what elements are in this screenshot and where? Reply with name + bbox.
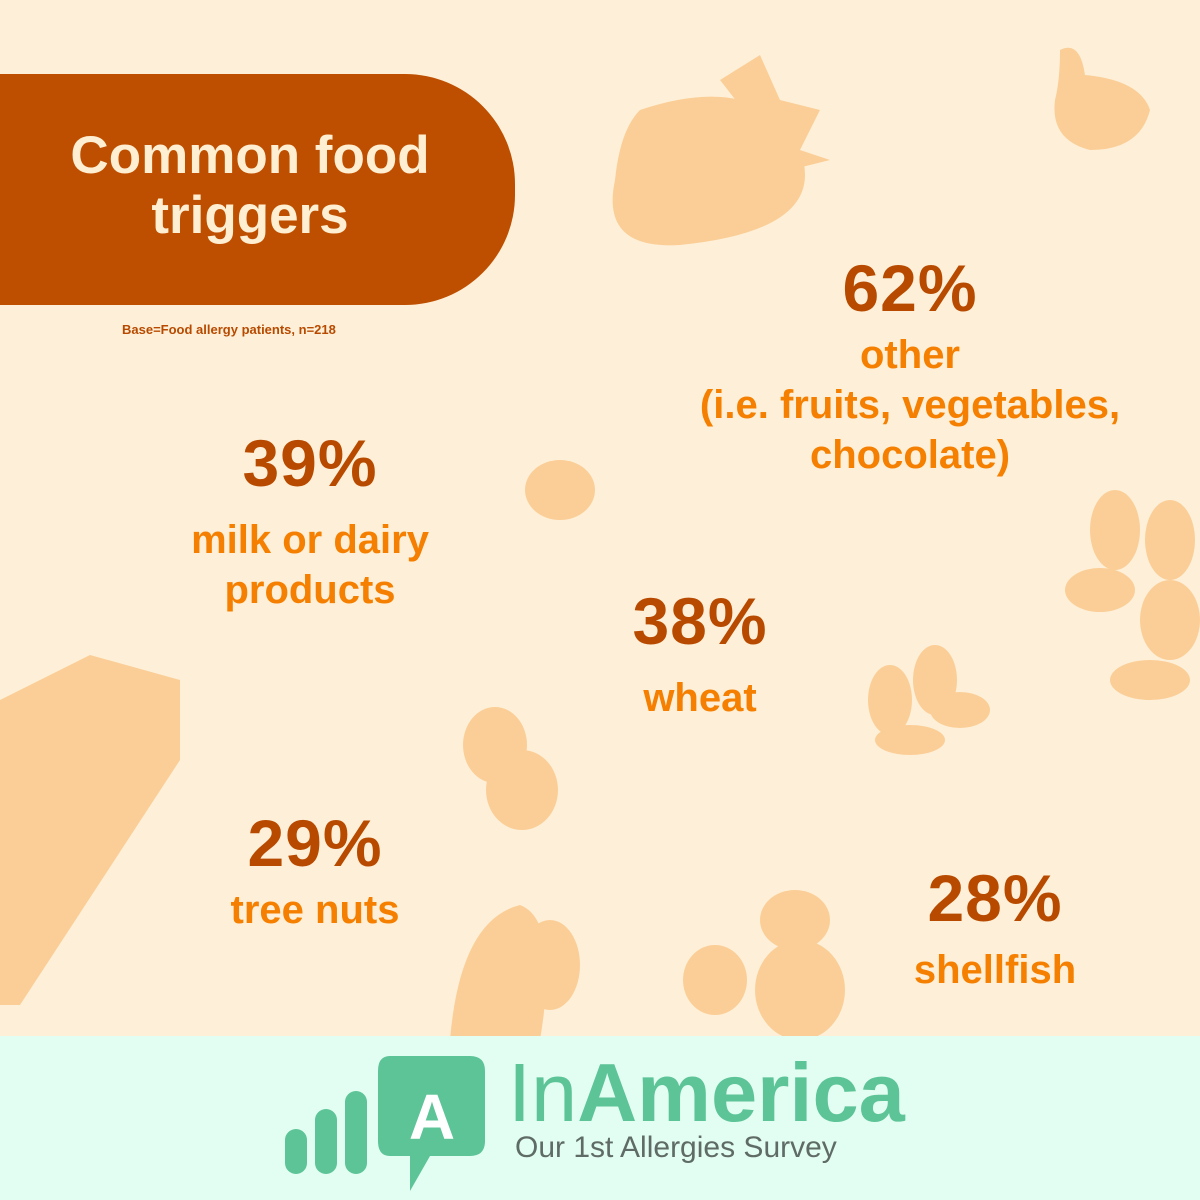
stat: other [700,251,1120,477]
stat: milk [191,426,429,612]
stat: wheat: 38% [632,584,768,658]
logo wordmark: InAmerica [508,1046,905,1139]
stat: milk: products [224,568,396,612]
stat: other: (i.e. fruits, vegetables, [700,383,1120,427]
logo icon [285,1056,485,1191]
stat: other: other [860,333,960,377]
icon: milk carton [0,655,180,1005]
stat: shellfish [914,861,1076,992]
logo icon: A [409,1081,455,1153]
base note: Base=Food allergy patients, n=218 [122,322,336,337]
icon: garlic [1054,48,1150,150]
stat: tree nuts: tree nuts [231,888,399,932]
stat: tree nuts: 29% [247,806,383,880]
stat: wheat [632,584,768,720]
title: Common food [70,126,430,185]
logo subtitle: Our 1st Allergies Survey [515,1131,837,1164]
stat: tree nuts [231,806,399,932]
title [70,126,430,245]
stat: wheat: wheat [643,676,757,720]
icon: acorn [525,460,595,520]
icon: peanut [463,707,558,830]
icon: wheat large [1065,490,1200,700]
stat: shellfish: shellfish [914,948,1076,992]
title: triggers [151,186,349,245]
title panel [0,74,515,305]
stat: shellfish: 28% [927,861,1063,935]
icon: strawberry [613,55,830,245]
stat: other: 62% [842,251,978,325]
icon: cashew/nut bottom [450,905,580,1040]
stat: milk: 39% [242,426,378,500]
icon: lobster [683,890,845,1040]
icon: wheat small [868,645,990,755]
footer [0,1036,1200,1200]
stat: other: chocolate) [810,433,1010,477]
stat: milk: milk or dairy [191,518,429,562]
